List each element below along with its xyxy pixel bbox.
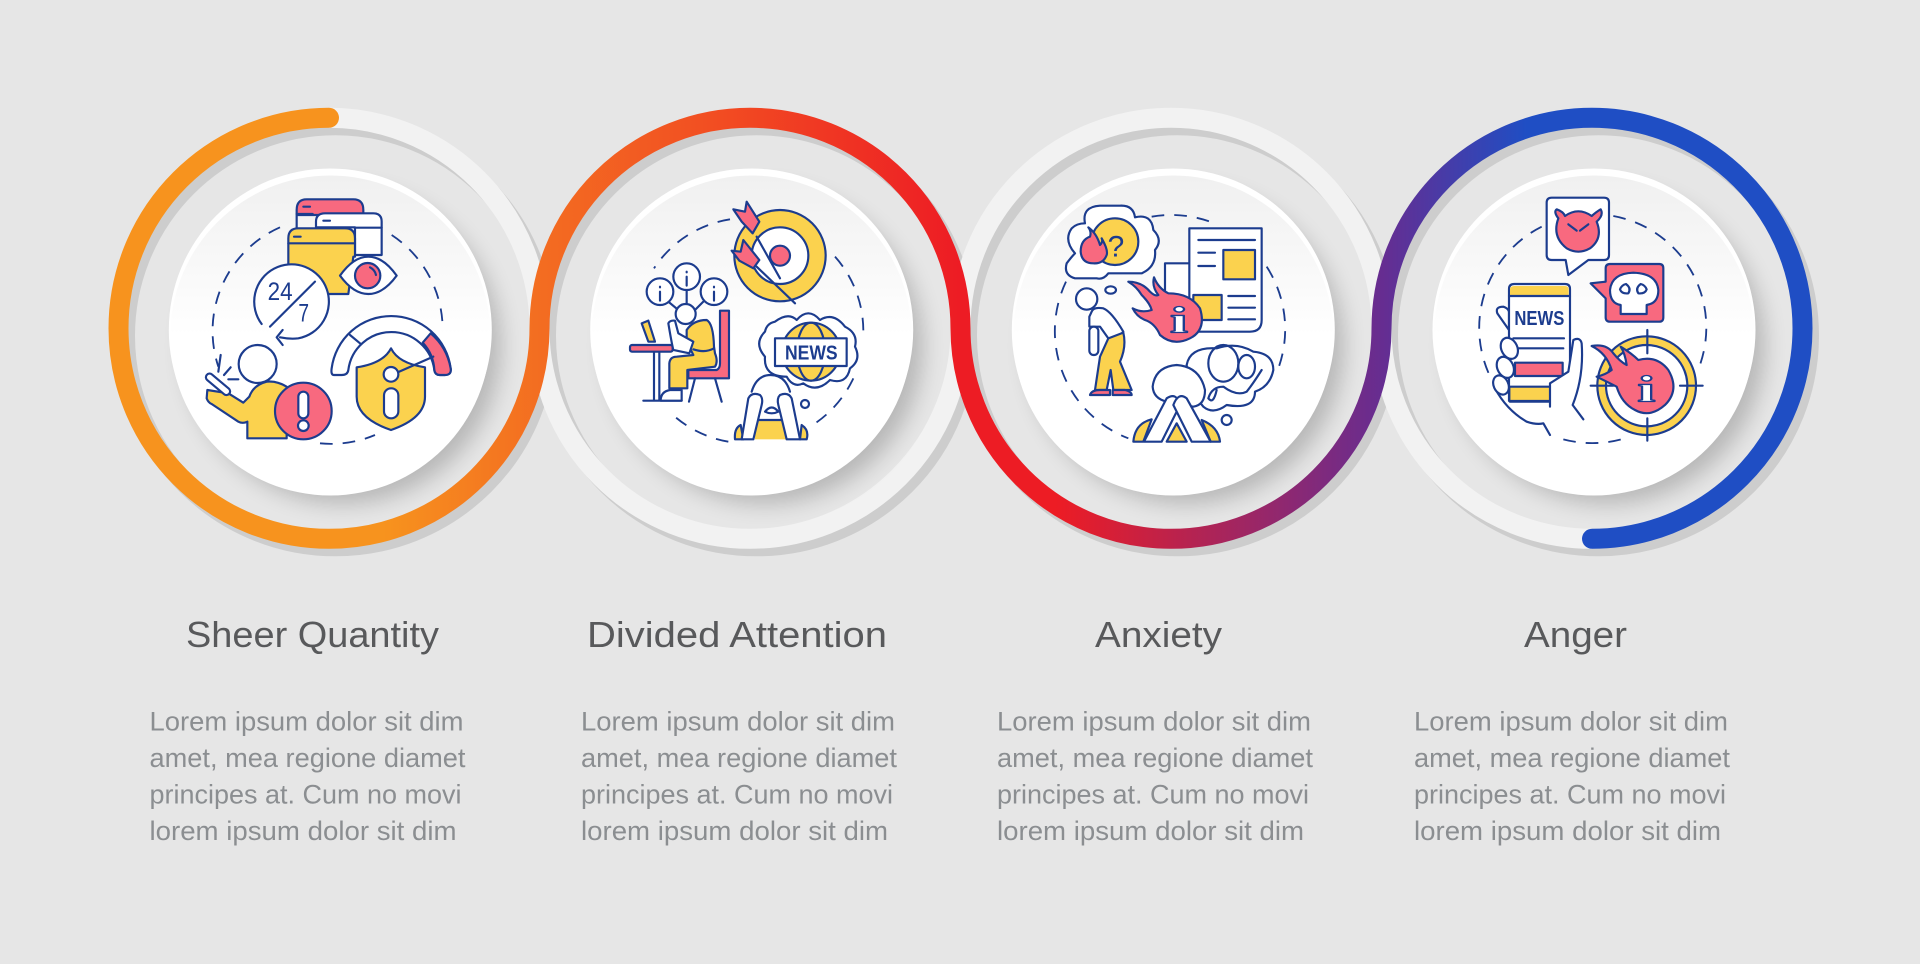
icon: sheer quantity [204, 199, 451, 444]
text block: Divided Attention: principes at. Cum no movi [581, 780, 893, 810]
icon: anger [1479, 198, 1706, 443]
heading: Anxiety: Anxiety [1095, 614, 1223, 655]
text block: Anger: amet, mea regione diamet [1414, 743, 1730, 773]
text block: Anger: lorem ipsum dolor sit dim [1414, 816, 1721, 846]
text block: Anxiety: amet, mea regione diamet [997, 743, 1313, 773]
heading: Sheer Quantity: Sheer Quantity [186, 614, 440, 655]
flowing gradient ribbon [118, 118, 1803, 539]
panel: Divided Attention disc [590, 168, 913, 496]
text block: Divided Attention: lorem ipsum dolor sit dim [581, 816, 888, 846]
text block: Divided Attention [581, 706, 897, 846]
text block: Sheer Quantity: lorem ipsum dolor sit dim [150, 816, 456, 846]
panel shadows [185, 188, 1765, 504]
heading: Divided Attention: Divided Attention [587, 614, 887, 655]
text block: Anxiety: lorem ipsum dolor sit dim [997, 816, 1304, 846]
background ring track [329, 118, 1592, 539]
text block: Sheer Quantity: principes at. Cum no movi [150, 780, 462, 810]
icon: anxiety: i [1170, 300, 1188, 341]
ring shadows [125, 125, 1809, 546]
icon: sheer quantity: 7 [298, 300, 309, 328]
text block: Anger: Lorem ipsum dolor sit dim [1414, 706, 1728, 736]
text block: Sheer Quantity: amet, mea regione diamet [150, 743, 466, 773]
text block: Sheer Quantity: Lorem ipsum dolor sit dim [150, 706, 464, 736]
heading: Anger: Anger [1524, 614, 1627, 655]
text block: Anxiety: Lorem ipsum dolor sit dim [997, 706, 1311, 736]
icon: divided attention: NEWS [785, 342, 838, 364]
text block: Anxiety: principes at. Cum no movi [997, 780, 1309, 810]
text block: Divided Attention: Lorem ipsum dolor sit dim [581, 706, 895, 736]
text block: Anxiety [997, 706, 1313, 846]
panel: Anger disc [1432, 168, 1756, 496]
icon: divided attention [630, 202, 863, 442]
icon: anxiety: ? [1108, 231, 1124, 264]
panel: Anxiety disc [1012, 168, 1335, 496]
icon: sheer quantity: 24 [268, 278, 293, 306]
icon: anxiety [1055, 206, 1285, 442]
panel: Sheer Quantity disc [169, 168, 492, 496]
icon: anger: NEWS [1514, 307, 1564, 330]
text block: Anger [1414, 706, 1730, 846]
text block: Sheer Quantity [150, 706, 466, 846]
icon: anger: i [1637, 369, 1655, 410]
text block: Anger: principes at. Cum no movi [1414, 780, 1726, 810]
text block: Divided Attention: amet, mea regione diamet [581, 743, 897, 773]
